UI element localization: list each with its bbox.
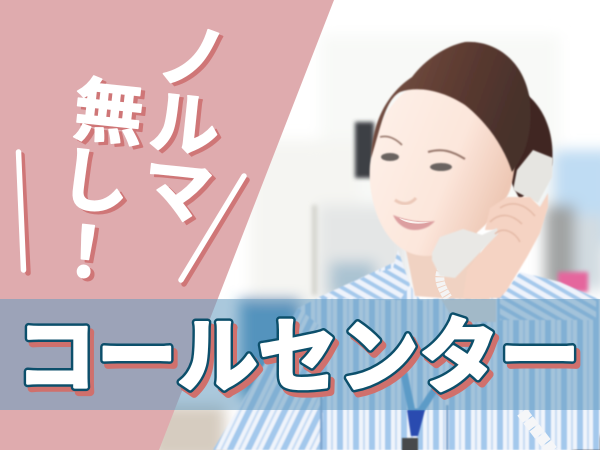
vertical heading: ノルマ: マ — [143, 153, 220, 238]
vertical heading: 無し！: 無 — [70, 71, 147, 156]
eyes — [381, 153, 399, 161]
neck — [405, 225, 490, 300]
hair bun — [505, 93, 553, 200]
vertical heading: 無し！: 無 — [74, 74, 151, 159]
mouth — [393, 215, 435, 230]
face — [370, 78, 515, 256]
title: コールセンター: コールセンター — [16, 312, 580, 403]
eyebrows — [380, 136, 402, 145]
fingers — [490, 204, 535, 242]
cord — [440, 268, 448, 298]
vertical heading: 無し！: し — [56, 140, 133, 225]
hair front — [371, 42, 531, 172]
photo: woman on the telephone — [213, 42, 600, 450]
vertical heading: ノルマ: マ — [139, 150, 216, 235]
vertical heading: 無し！: ！ — [51, 214, 128, 299]
title: コールセンター: コールセンター — [16, 312, 580, 403]
vertical heading: ノルマ — [139, 16, 235, 238]
nose — [395, 198, 416, 204]
gap beside neck — [441, 299, 496, 322]
vertical heading: ノルマ: ル — [146, 83, 223, 168]
translucent title band — [0, 299, 600, 410]
vertical heading: ノルマ: ノ — [154, 16, 231, 101]
vertical heading: 無し！ — [47, 71, 151, 299]
pink diagonal panel — [0, 0, 334, 450]
accent line: left — [18, 152, 28, 273]
telephone handset — [432, 228, 498, 278]
vertical heading: ノルマ: ル — [150, 86, 227, 171]
accent line: right — [181, 176, 247, 284]
vertical heading: 無し！: し — [60, 143, 137, 228]
shirt — [213, 250, 600, 450]
hand — [463, 193, 548, 298]
vertical heading: 無し！: ！ — [47, 211, 124, 296]
lanyard — [402, 373, 437, 450]
telephone earpiece — [513, 150, 553, 203]
vertical heading: ノルマ: ノ — [158, 19, 235, 104]
title: コールセンター: コールセンター — [20, 317, 584, 408]
